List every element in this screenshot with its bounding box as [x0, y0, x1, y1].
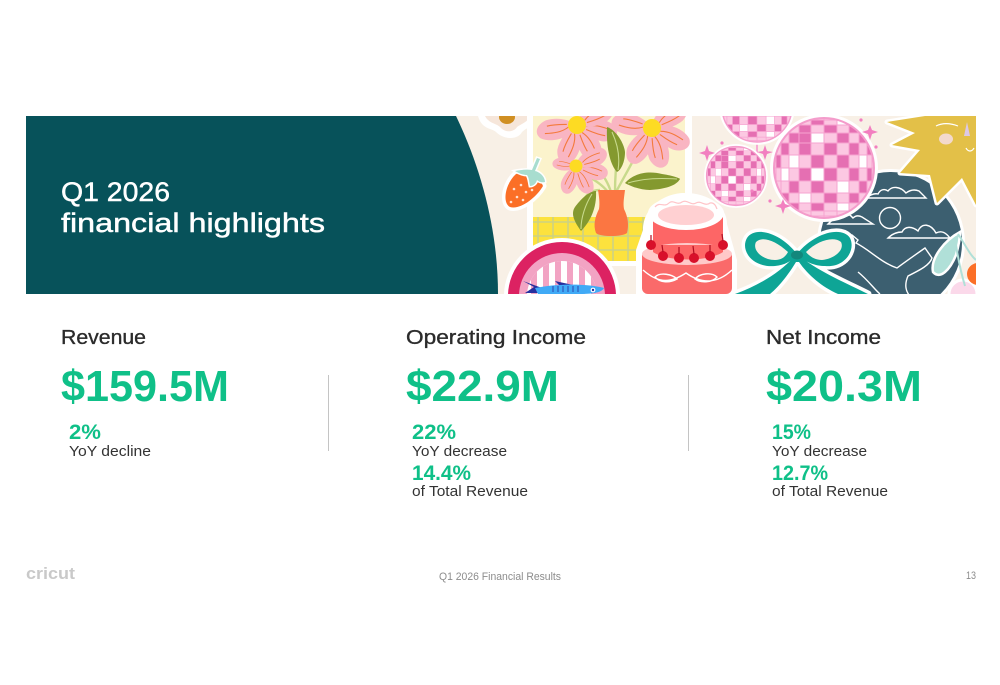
- revenue change label: YoY decline: [69, 443, 151, 460]
- revenue value: $159.5M: [61, 362, 229, 411]
- icon: small disco ball top: [720, 116, 794, 153]
- icon: fish plate: [504, 238, 620, 294]
- title: financial highlights: [61, 208, 325, 238]
- icon: flowers in vase: [536, 116, 690, 236]
- footer title: Q1 2026 Financial Results: [439, 571, 561, 583]
- operating income change: 22%: [412, 421, 456, 444]
- logo: cricut: cricut: [26, 564, 75, 583]
- icon: sparkles: [699, 118, 878, 214]
- still life panel: [527, 116, 692, 266]
- icon: medium disco ball: [705, 145, 767, 207]
- net margin: 12.7%: [772, 462, 828, 485]
- net margin label: of Total Revenue: [772, 483, 888, 500]
- illustration collage: [456, 116, 976, 294]
- operating margin label: of Total Revenue: [412, 483, 528, 500]
- net income change label: YoY decrease: [772, 443, 867, 460]
- teal title panel: [26, 116, 498, 294]
- divider: [688, 375, 689, 451]
- panel: revenue: [61, 327, 229, 460]
- icon: flower sticker: [478, 116, 527, 138]
- heading: net income: Net Income: [766, 327, 881, 349]
- banner: [26, 116, 976, 294]
- icon: blue mountain scene: [818, 169, 965, 294]
- operating income value: $22.9M: [406, 362, 559, 411]
- icon: cherry: [931, 230, 976, 294]
- title: [61, 177, 325, 238]
- net income change: 15%: [772, 421, 811, 444]
- panel: net income: [766, 327, 922, 500]
- fish: [523, 281, 604, 294]
- page number: 13: [966, 570, 976, 582]
- heading: operating income: Operating Income: [406, 327, 586, 349]
- icon: strawberry: [505, 158, 545, 207]
- icon: large disco ball: [772, 116, 876, 220]
- icon: sun: [887, 116, 976, 205]
- net income value: $20.3M: [766, 362, 922, 411]
- divider: [328, 375, 329, 451]
- title: Q1 2026: [61, 177, 170, 207]
- heading: revenue: Revenue: [61, 327, 146, 349]
- icon: ribbon bow: [735, 232, 868, 294]
- icon: cake: [636, 193, 737, 294]
- revenue change: 2%: [69, 421, 101, 444]
- operating income change label: YoY decrease: [412, 443, 507, 460]
- operating margin: 14.4%: [412, 462, 471, 485]
- panel: operating income: [406, 327, 586, 500]
